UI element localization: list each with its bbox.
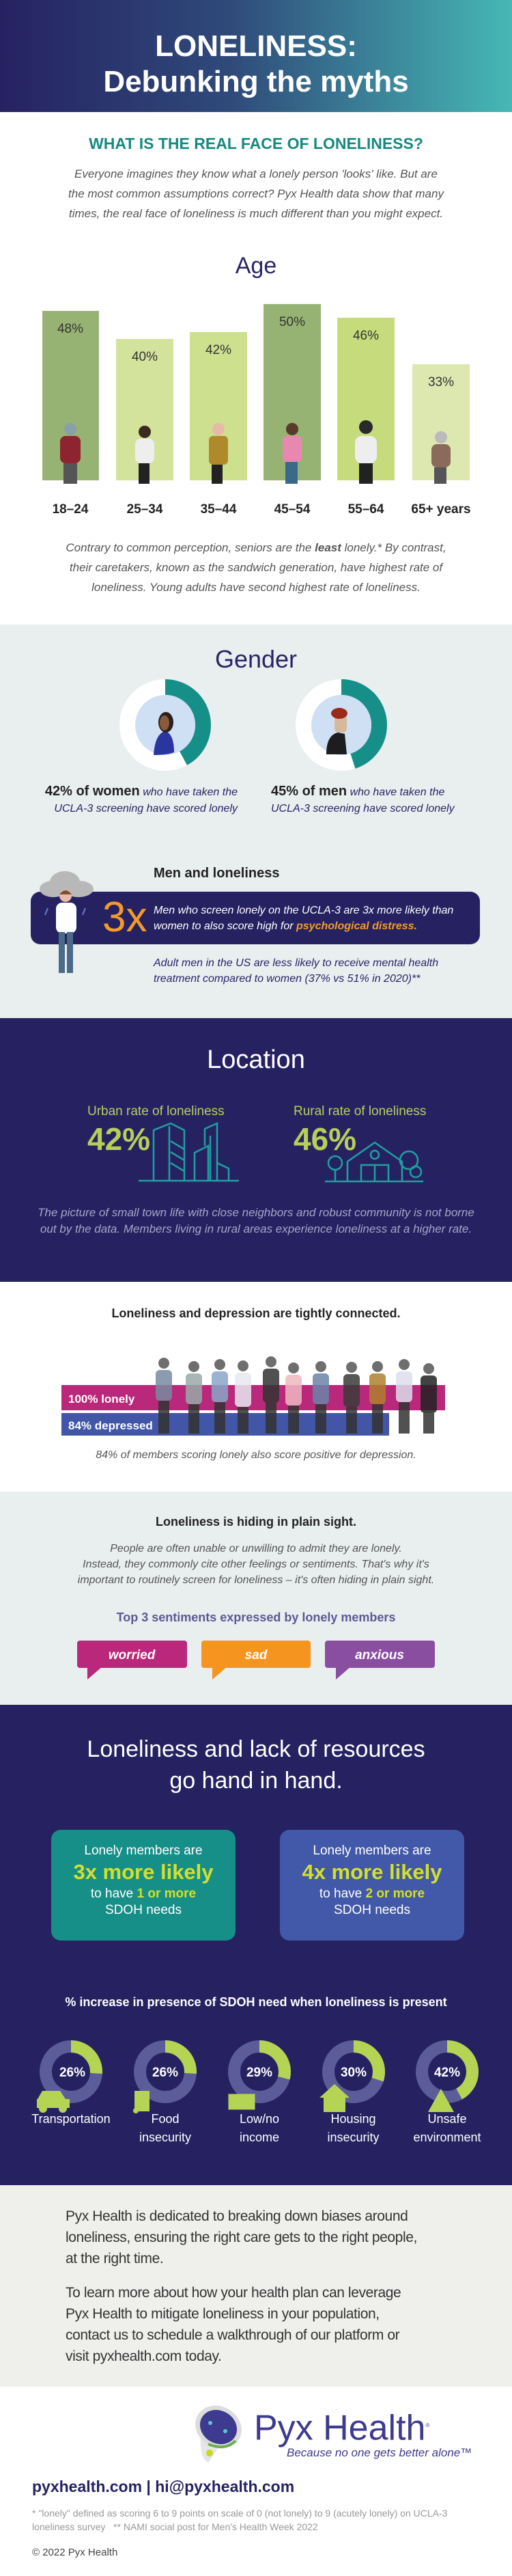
heading: Gender: Gender <box>215 645 297 673</box>
speech bubbles <box>77 1641 435 1680</box>
panel: location: 42% <box>87 1121 150 1157</box>
location paragraph: The picture of small town life with close neighbors and robust community is not borne <box>38 1206 474 1219</box>
donut: men <box>296 679 387 771</box>
depression caption: 84% of members scoring lonely also score positive for depression. <box>96 1449 416 1461</box>
heading: men and loneliness: Men and loneliness <box>154 866 279 881</box>
copyright: © 2022 Pyx Health <box>32 2547 117 2558</box>
panel: gender <box>0 625 512 1018</box>
card: 4x: Lonely members are <box>313 1844 431 1858</box>
bar chart: lonely vs depressed: 84% depressed <box>68 1419 153 1432</box>
donut charts: SDOH: 26% <box>59 2066 85 2080</box>
contact line: pyxhealth.com | hi@pyxhealth.com <box>32 2478 294 2495</box>
heading: Loneliness is hiding in plain sight. <box>156 1515 356 1529</box>
donut charts: SDOH: 42% <box>434 2066 460 2080</box>
icon: city buildings <box>139 1122 239 1182</box>
text block: contact us to schedule a walkthrough of our platform or <box>66 2327 399 2343</box>
icon: man under cloud <box>40 871 94 973</box>
bar chart: lonely vs depressed <box>61 1356 445 1436</box>
speech bubbles: worried <box>109 1648 156 1662</box>
title: Debunking the myths <box>103 65 409 98</box>
speech bubbles: anxious <box>355 1648 404 1662</box>
people figures <box>60 420 451 484</box>
paragraph: People are often unable or unwilling to admit they are lonely. <box>110 1543 402 1554</box>
urban stat: Urban rate of loneliness <box>87 1104 225 1119</box>
icon: robot <box>195 2405 242 2463</box>
card: 3x: to have 1 or more <box>91 1887 196 1901</box>
bar chart: age: 40% <box>132 350 158 364</box>
text block: at the right time. To learn more about how your health plan can leverage <box>66 2251 401 2301</box>
panel: location: 46% <box>294 1121 356 1157</box>
age paragraph <box>66 541 446 594</box>
panel: location <box>0 1018 512 1282</box>
intro paragraph <box>68 167 444 220</box>
rural stat: Rural rate of loneliness <box>294 1104 426 1119</box>
bar chart: age: 55–64 <box>348 502 384 517</box>
logo: Pyx Health: Because no one gets better alone™ <box>287 2446 472 2459</box>
crowd of people <box>156 1356 437 1434</box>
card: 4x: 4x more likely <box>302 1860 442 1884</box>
panel: resources: Low/no <box>240 2112 279 2126</box>
bar chart: lonely vs depressed: 100% lonely <box>68 1393 135 1406</box>
card: 3x: Lonely members are <box>84 1844 203 1858</box>
age paragraph: loneliness. Young adults have second highest rate of loneliness. <box>91 581 421 594</box>
speech bubbles: sad <box>245 1648 268 1662</box>
paragraph: Instead, they commonly cite other feelings or sentiments. That's why it's <box>83 1559 429 1570</box>
panel: closing message <box>0 2185 512 2387</box>
intro paragraph: the most common assumptions correct? Pyx Health data show that many <box>68 187 444 200</box>
heading <box>87 1736 425 1794</box>
heading: Location: Location <box>207 1045 305 1074</box>
intro paragraph: Everyone imagines they know what a lonely person 'looks' like. But are <box>74 167 438 180</box>
bar chart: age: 50% <box>279 315 305 329</box>
panel: resources: insecurity <box>327 2130 380 2144</box>
age paragraph: their caretakers, known as the sandwich generation, have highest rate of <box>70 561 442 574</box>
SDOH labels <box>31 2112 481 2144</box>
card: 4x: to have 2 or more <box>319 1887 425 1901</box>
panel: resources: insecurity <box>139 2130 191 2144</box>
heading: Age: Age <box>236 253 276 279</box>
big 3x: 3x <box>102 894 147 941</box>
panel: resources: Housing <box>330 2112 376 2126</box>
panel: resources: income <box>240 2130 279 2144</box>
donut charts: SDOH: 29% <box>246 2066 272 2080</box>
donut: women <box>119 679 211 771</box>
bar chart: age: 45–54 <box>274 502 311 517</box>
card: 3x: 3x more likely <box>73 1860 214 1884</box>
location paragraph <box>38 1206 474 1235</box>
logo: Pyx Health: Pyx Health® <box>254 2408 429 2448</box>
header banner <box>0 0 512 112</box>
text block <box>66 2208 417 2364</box>
text block: Pyx Health is dedicated to breaking down biases around <box>66 2208 408 2224</box>
icons <box>37 2084 454 2113</box>
card: 3x <box>51 1830 236 1941</box>
subheading: top 3 sentiments: Top 3 sentiments expressed by lonely members <box>117 1611 395 1624</box>
bar chart: age <box>42 304 471 517</box>
title <box>103 29 409 98</box>
bar chart: age: 35–44 <box>201 502 237 517</box>
heading: go hand in hand. <box>169 1768 343 1794</box>
age paragraph: Contrary to common perception, seniors are the least lonely.* By contrast, <box>66 541 446 554</box>
donut charts: SDOH <box>37 2040 479 2113</box>
panel: resources: Food <box>151 2112 180 2126</box>
logo: Pyx Health <box>195 2405 472 2463</box>
bar chart: age: 18–24 <box>53 502 89 517</box>
card: 4x <box>280 1830 464 1941</box>
subheading: real face: WHAT IS THE REAL FACE OF LONELINESS? <box>89 135 423 152</box>
panel: resources: Unsafe <box>427 2112 467 2126</box>
footnotes: * "lonely" defined as scoring 6 to 9 points on scale of 0 (not lonely) to 9 (acutely lonely) on UCLA-3 loneliness survey ** NAMI social post for Men's Health Week 2022 <box>32 2508 447 2532</box>
subheading: % increase: % increase in presence of SDOH need when loneliness is present <box>65 1995 447 2009</box>
title: LONELINESS: <box>155 29 357 63</box>
bar chart: age: 46% <box>353 329 379 343</box>
location paragraph: out by the data. Members living in rural areas experience loneliness at a higher rate. <box>40 1222 472 1235</box>
heading: Loneliness and lack of resources <box>87 1736 425 1762</box>
donut charts: SDOH: 26% <box>152 2066 178 2080</box>
heading: depression: Loneliness and depression are tightly connected. <box>111 1306 401 1320</box>
panel: resources <box>0 1705 512 2185</box>
text block: visit pyxhealth.com today. <box>66 2348 221 2364</box>
panel: resources: environment <box>413 2130 481 2144</box>
intro paragraph: times, the real face of loneliness is much different than you might expect. <box>69 207 443 220</box>
callout: 3x box <box>31 892 480 944</box>
card: 4x: SDOH needs <box>334 1903 410 1917</box>
paragraph <box>78 1543 434 1586</box>
bar chart: age: 25–34 <box>127 502 163 517</box>
text block: Pyx Health to mitigate loneliness in your population, <box>66 2306 380 2322</box>
icon: house with trees <box>325 1141 423 1182</box>
bar chart: age: 65+ years <box>411 502 471 517</box>
text: adult men treatment: Adult men in the US are less likely to receive mental health treatment compared to women (37% vs 51% in 2020)** <box>154 957 438 985</box>
panel: resources: Transportation <box>31 2112 111 2126</box>
panel: hiding in plain sight <box>0 1492 512 1705</box>
card: 3x: SDOH needs <box>105 1903 182 1917</box>
paragraph: important to routinely screen for loneliness – it's often hiding in plain sight. <box>78 1574 434 1586</box>
text: women stat: 42% of women who have taken the UCLA-3 screening have scored lonely <box>45 784 238 814</box>
donut charts: SDOH: 30% <box>341 2066 367 2080</box>
text block: loneliness, ensuring the right care gets to the right people, <box>66 2230 417 2245</box>
callout text: Men who screen lonely on the UCLA-3 are 3x more likely than women to also score high for psychological distress. <box>154 905 453 932</box>
bar chart: age: 33% <box>428 375 454 389</box>
bar chart: age: 48% <box>57 322 83 336</box>
text: men stat: 45% of men who have taken the UCLA-3 screening have scored lonely <box>271 784 455 814</box>
bar chart: age: 42% <box>205 343 231 357</box>
